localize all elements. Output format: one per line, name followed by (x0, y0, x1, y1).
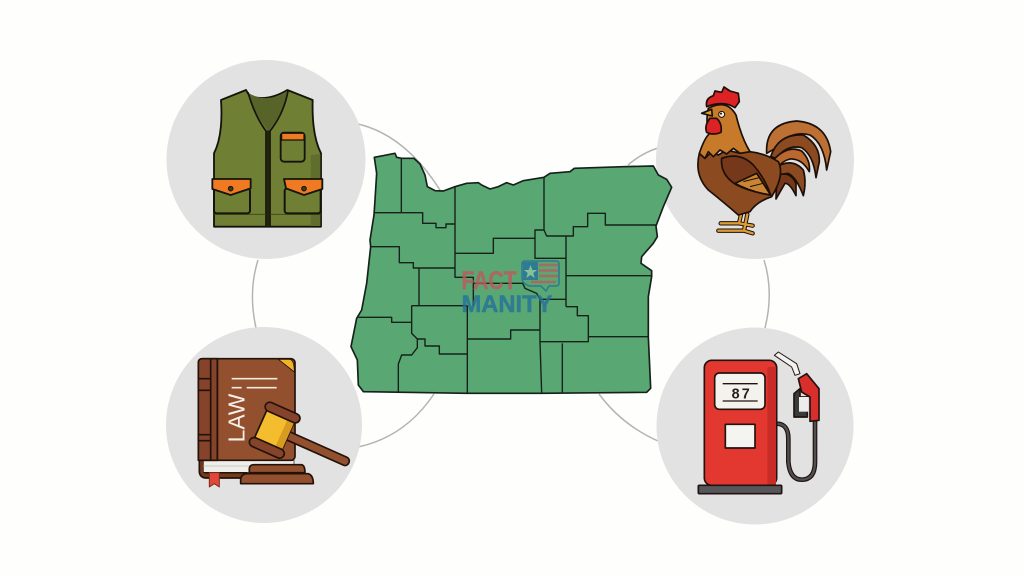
county borders (358, 158, 656, 393)
icon circle: law book and gavel (166, 327, 362, 523)
fuel pump illustration (698, 352, 819, 494)
logo flag speech bubble (522, 261, 559, 291)
icon circle: fuel pump (656, 328, 854, 524)
price grade display: 87 (732, 386, 750, 402)
rooster illustration (698, 87, 831, 233)
book title: LAW (223, 394, 249, 442)
vest illustration (212, 90, 322, 227)
icon circle: rooster (656, 61, 854, 259)
law book illustration (198, 359, 358, 487)
icon circle: hunting vest (166, 60, 366, 259)
gavel (248, 401, 358, 485)
logo word: MANITY: MANITY (462, 291, 552, 318)
map of Oregon (351, 153, 672, 393)
connector arcs (252, 124, 769, 447)
watermark logo (462, 261, 559, 318)
logo word: FACT: FACT (462, 267, 516, 295)
state outline (351, 153, 672, 393)
